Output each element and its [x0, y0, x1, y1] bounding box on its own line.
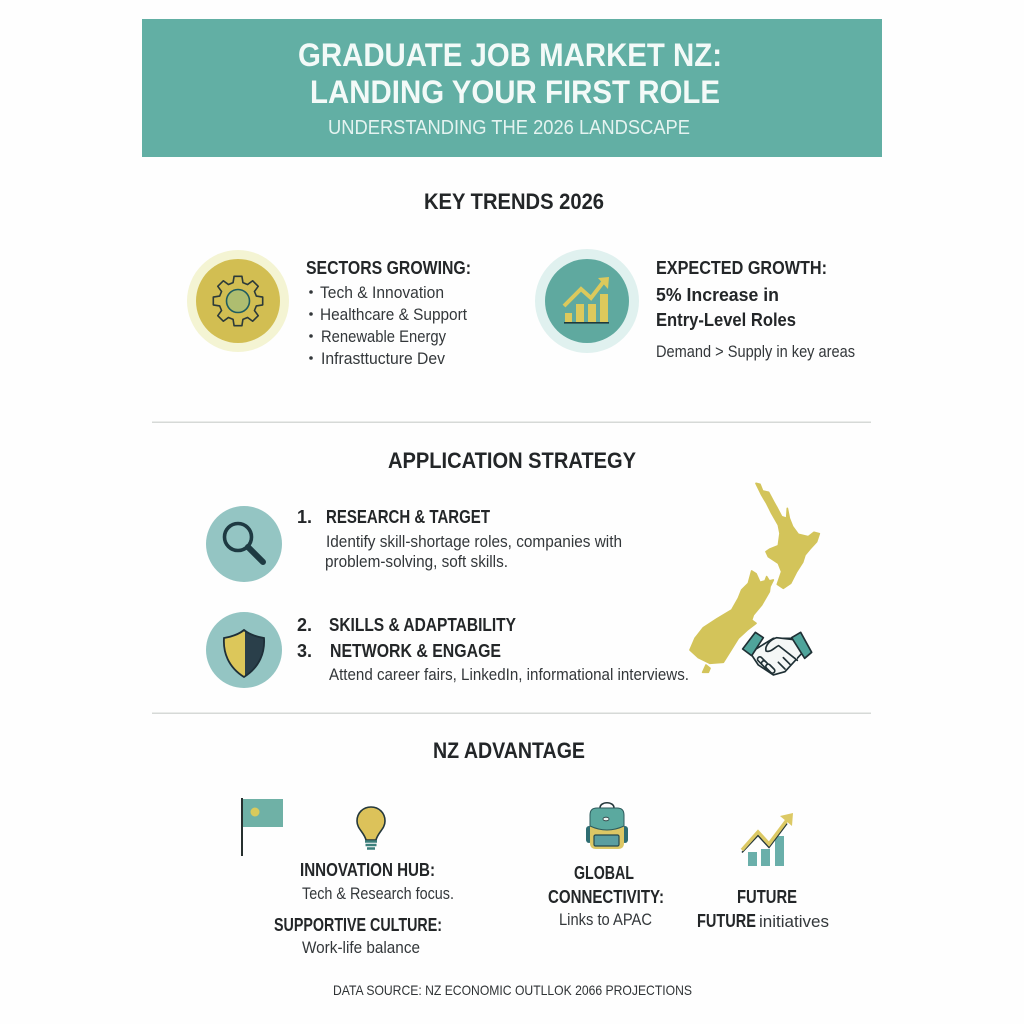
text: future: FUTURE	[697, 911, 756, 931]
title: GRADUATE JOB MARKET NZ:	[298, 37, 722, 73]
text: step 3: NETWORK & ENGAGE	[330, 641, 501, 661]
panel: expected growth	[535, 249, 855, 361]
text: step 1: RESEARCH & TARGET	[326, 507, 490, 527]
text: sectors list: Renewable Energy	[321, 327, 446, 346]
icon: shield	[206, 612, 282, 688]
text: step 3: Attend career fairs, LinkedIn, informational interviews.	[329, 665, 689, 684]
text: sectors list: Tech & Innovation	[320, 283, 444, 302]
text: step 1	[297, 507, 622, 571]
map: New Zealand	[690, 483, 819, 672]
text: supportive culture: SUPPORTIVE CULTURE:	[274, 915, 442, 935]
text: growth figures: 5% Increase in	[656, 285, 779, 305]
icon: rising chart	[742, 813, 793, 866]
icon: growth chart	[535, 249, 639, 353]
text: innovation hub: INNOVATION HUB:	[300, 860, 435, 880]
header banner	[142, 19, 882, 157]
text: growth figures	[656, 258, 855, 361]
text: global connectivity: GLOBAL	[574, 863, 634, 883]
text: future: initiatives	[759, 912, 829, 931]
icon: backpack	[586, 803, 628, 849]
text: future: FUTURE	[737, 887, 797, 907]
text: step 2: 2.	[297, 615, 312, 635]
text: global connectivity: Links to APAC	[559, 910, 652, 929]
icon: magnifier	[206, 506, 282, 582]
text: step 1: Identify skill-shortage roles, companies with	[326, 532, 622, 551]
text: future	[697, 887, 829, 931]
text: sectors list: Infrasttucture Dev	[321, 349, 445, 368]
text: innovation hub	[300, 860, 454, 903]
text: growth figures: EXPECTED GROWTH:	[656, 258, 827, 278]
icon: handshake	[743, 632, 812, 675]
title	[298, 37, 722, 110]
heading: application strategy: APPLICATION STRATEGY	[388, 448, 636, 473]
icon: gear	[187, 250, 289, 352]
text: sectors list: Healthcare & Support	[320, 305, 467, 324]
text: sectors list	[306, 258, 471, 368]
text: step 1: 1.	[297, 507, 312, 527]
title: LANDING YOUR FIRST ROLE	[310, 74, 720, 110]
icon: flag	[241, 798, 283, 856]
icon: light bulb	[357, 807, 385, 848]
text: step 3	[297, 641, 689, 684]
text: step 3: 3.	[297, 641, 312, 661]
panel: sectors growing	[187, 250, 471, 368]
heading: key trends: KEY TRENDS 2026	[424, 189, 604, 214]
text: step 2: SKILLS & ADAPTABILITY	[329, 615, 516, 635]
subtitle: UNDERSTANDING THE 2026 LANDSCAPE	[328, 117, 690, 139]
text: supportive culture	[274, 915, 442, 957]
text: growth figures: Demand > Supply in key areas	[656, 342, 855, 361]
text: global connectivity: CONNECTIVITY:	[548, 887, 664, 907]
text: innovation hub: Tech & Research focus.	[302, 884, 454, 903]
text: growth figures: Entry-Level Roles	[656, 310, 796, 330]
text: sectors list: SECTORS GROWING:	[306, 258, 471, 278]
data source: DATA SOURCE: NZ ECONOMIC OUTLLOK 2066 PROJECTIONS	[333, 982, 692, 998]
text: supportive culture: Work-life balance	[302, 938, 420, 957]
heading: nz advantage: NZ ADVANTAGE	[433, 738, 585, 763]
text: global connectivity	[548, 863, 664, 929]
text: step 1: problem-solving, soft skills.	[325, 552, 508, 571]
